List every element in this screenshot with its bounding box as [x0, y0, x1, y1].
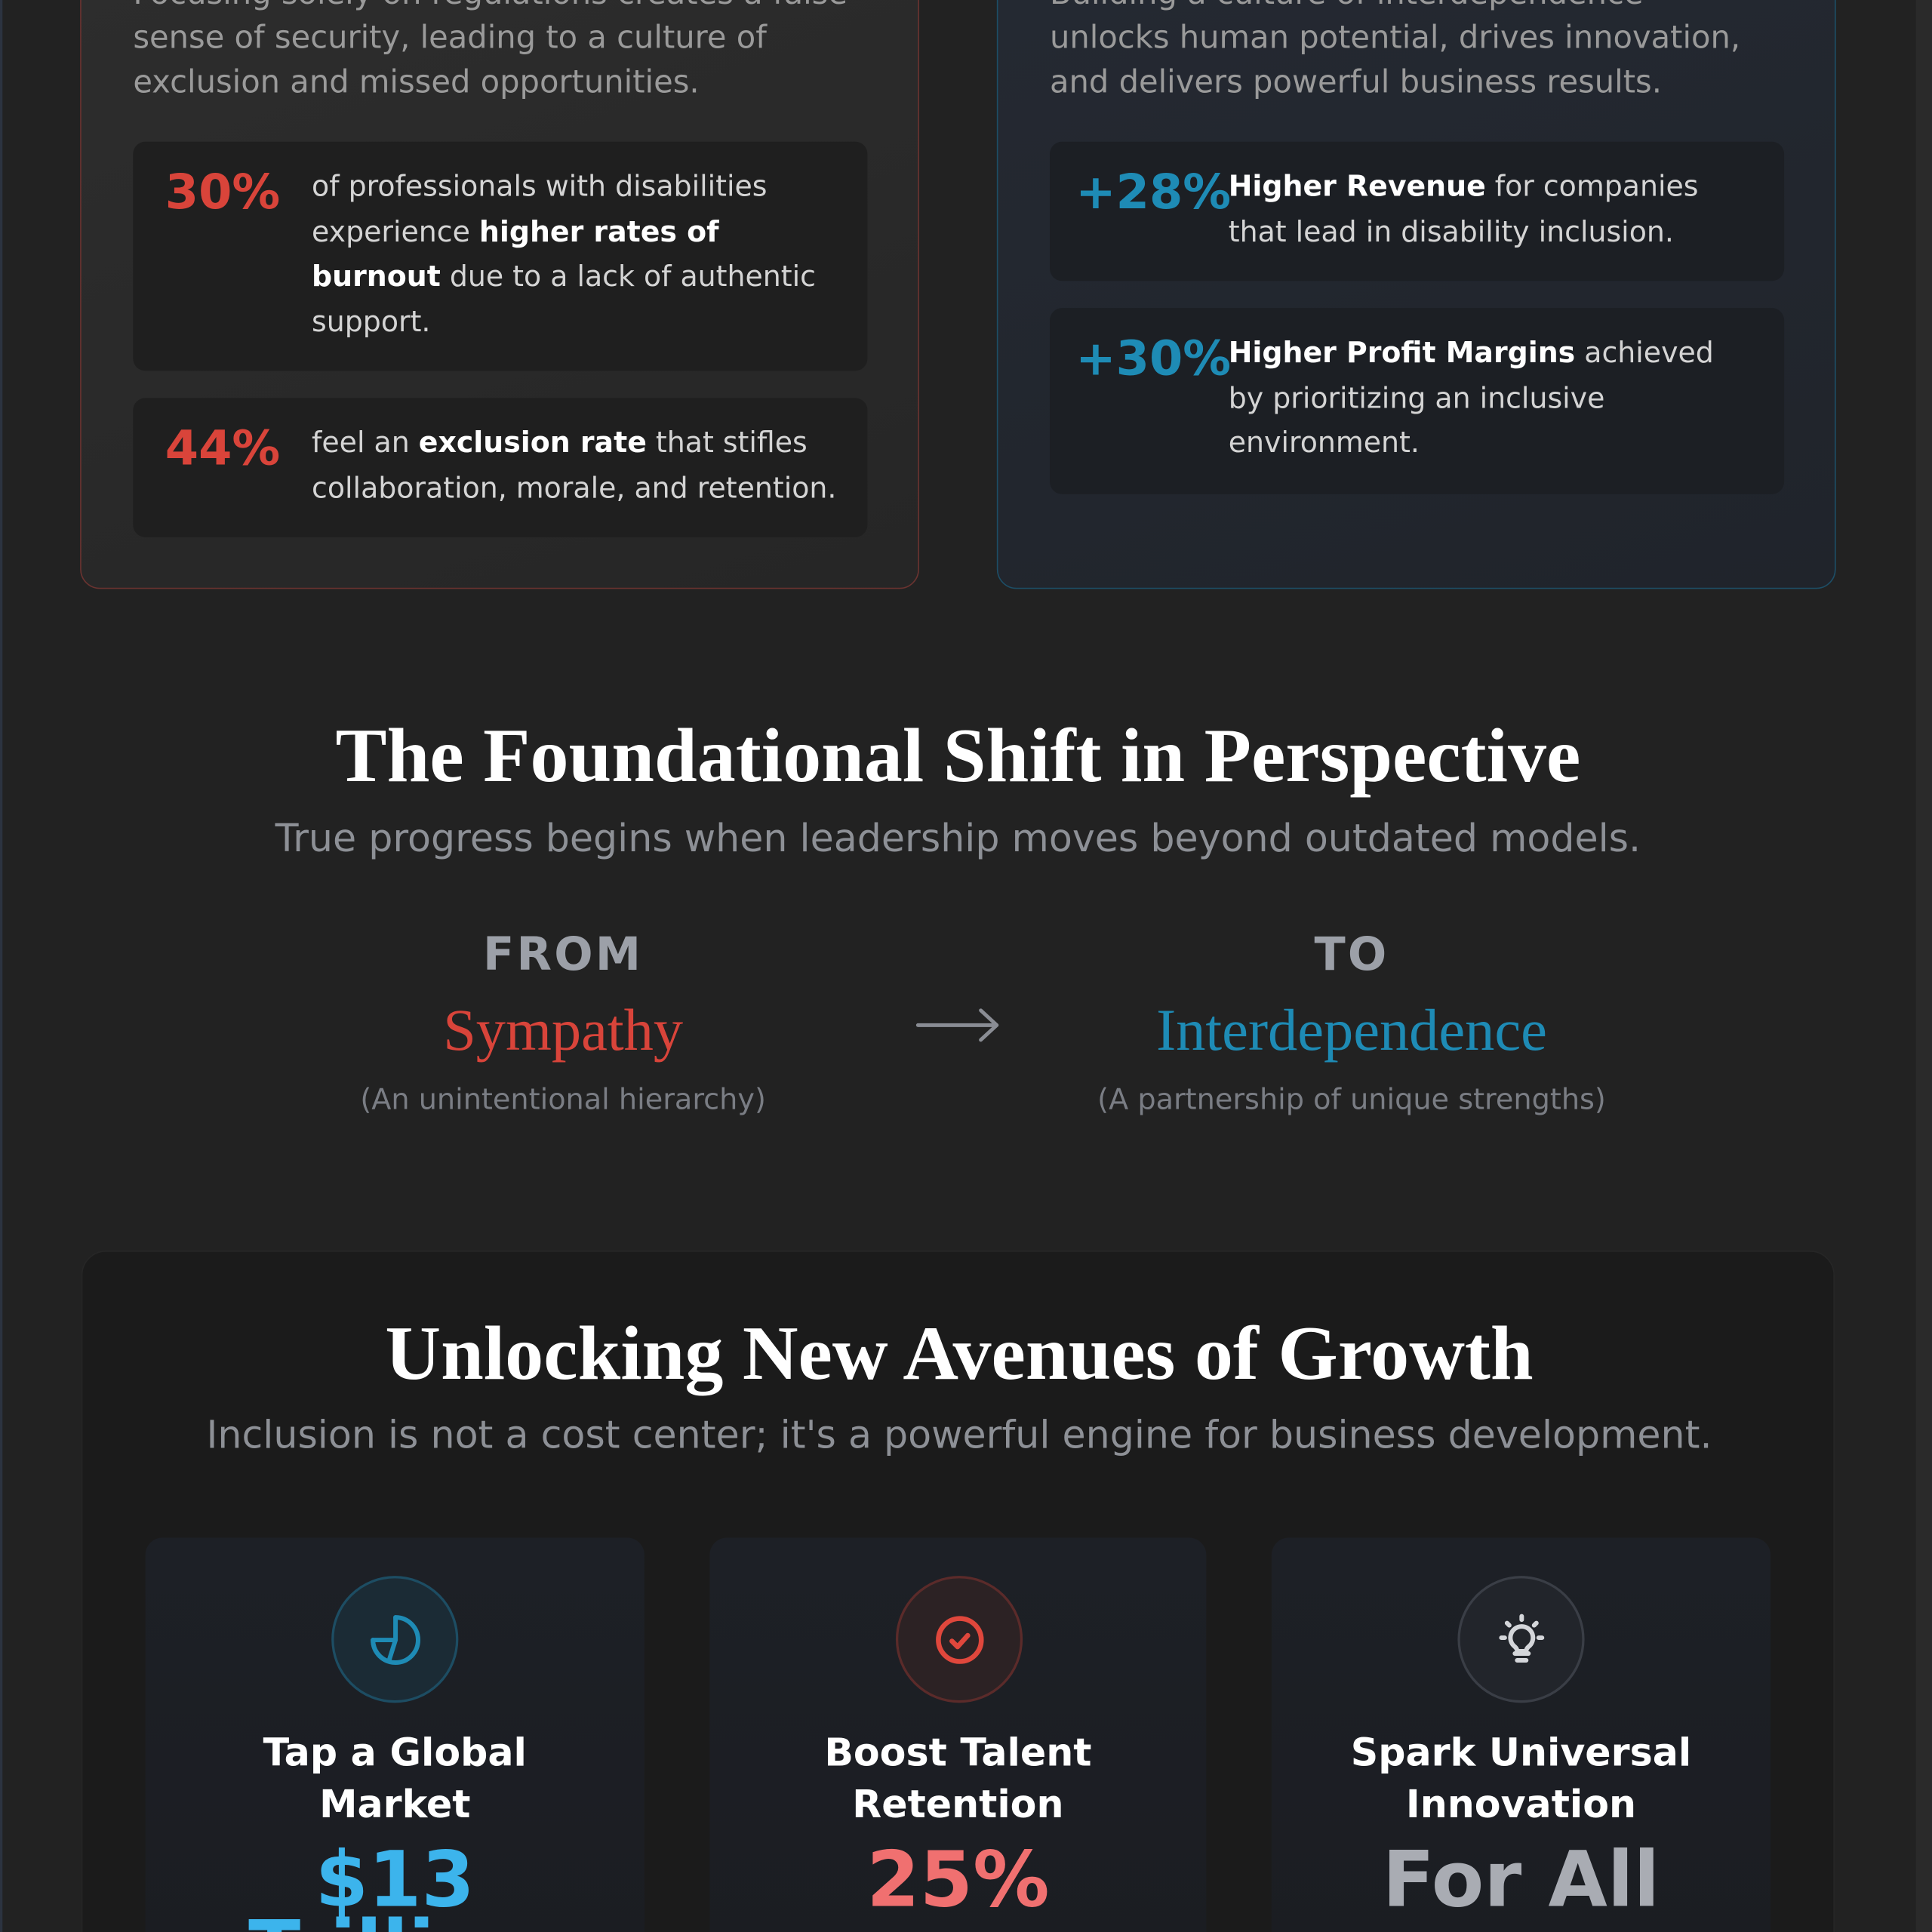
from block: Sympathy — [443, 998, 683, 1063]
card title: Market — [319, 1783, 470, 1827]
stat: +28% revenue: Higher Revenue for companies that lead in disability inclusion. — [1229, 170, 1698, 248]
panel: growth — [82, 1251, 1835, 1932]
stat: +28% revenue — [1050, 142, 1784, 281]
stat: +30% margins — [1050, 308, 1784, 494]
stat: 30% burnout — [133, 142, 867, 371]
card title — [824, 1731, 1091, 1827]
panel: risk of compliance — [80, 0, 919, 589]
arrow — [916, 1008, 999, 1041]
card title — [263, 1731, 527, 1827]
panel: interdependence advantage — [997, 0, 1836, 589]
stat: 30% burnout: of professionals with disabilities experience higher rates of burnout due to a lack of authentic support. — [312, 170, 816, 338]
card title: Tap a Global — [263, 1731, 527, 1776]
card: global market — [146, 1538, 645, 1932]
card title: Boost Talent — [824, 1731, 1091, 1776]
icon: lightbulb — [1457, 1576, 1585, 1703]
stat: +30% margins: Higher Profit Margins achieved by prioritizing an inclusive environment. — [1229, 337, 1714, 460]
heading: growth: Unlocking New Avenues of Growth — [385, 1310, 1534, 1396]
from block: FROM — [483, 928, 643, 981]
stat: 44% exclusion — [133, 398, 867, 537]
card title — [1351, 1731, 1691, 1827]
stat: +30% margins: +30% — [1075, 331, 1231, 387]
page edge strip — [1916, 0, 1932, 1932]
stat: 44% exclusion: feel an exclusion rate that stifles collaboration, morale, and retention. — [312, 426, 836, 505]
card title: Retention — [852, 1783, 1063, 1827]
heading: foundational shift: The Foundational Shift in Perspective — [336, 712, 1580, 798]
card: talent retention — [709, 1538, 1206, 1932]
from block: (An unintentional hierarchy) — [360, 1081, 766, 1116]
big stat: For All — [1383, 1835, 1660, 1924]
stat: 30% burnout: 30% — [165, 165, 280, 220]
card title: Spark Universal — [1351, 1731, 1691, 1776]
big stat: $13 — [315, 1835, 475, 1924]
icon: pie chart — [331, 1576, 458, 1703]
from block — [360, 928, 766, 1116]
big stat: 25% — [866, 1835, 1050, 1924]
stat: 44% exclusion: 44% — [165, 421, 280, 477]
to block — [1097, 928, 1606, 1116]
to block: (A partnership of unique strengths) — [1097, 1081, 1606, 1116]
card: innovation — [1272, 1538, 1770, 1932]
to block: TO — [1314, 928, 1389, 981]
big stat — [248, 1835, 541, 1932]
to block: Interdependence — [1156, 998, 1547, 1063]
subtitle: growth: Inclusion is not a cost center; it's a powerful engine for business development. — [206, 1414, 1712, 1457]
subtitle: shift: True progress begins when leadership moves beyond outdated models. — [275, 817, 1641, 861]
icon: check circle — [896, 1576, 1023, 1703]
card title: Innovation — [1406, 1783, 1636, 1827]
stat: +28% revenue: +28% — [1075, 165, 1231, 220]
